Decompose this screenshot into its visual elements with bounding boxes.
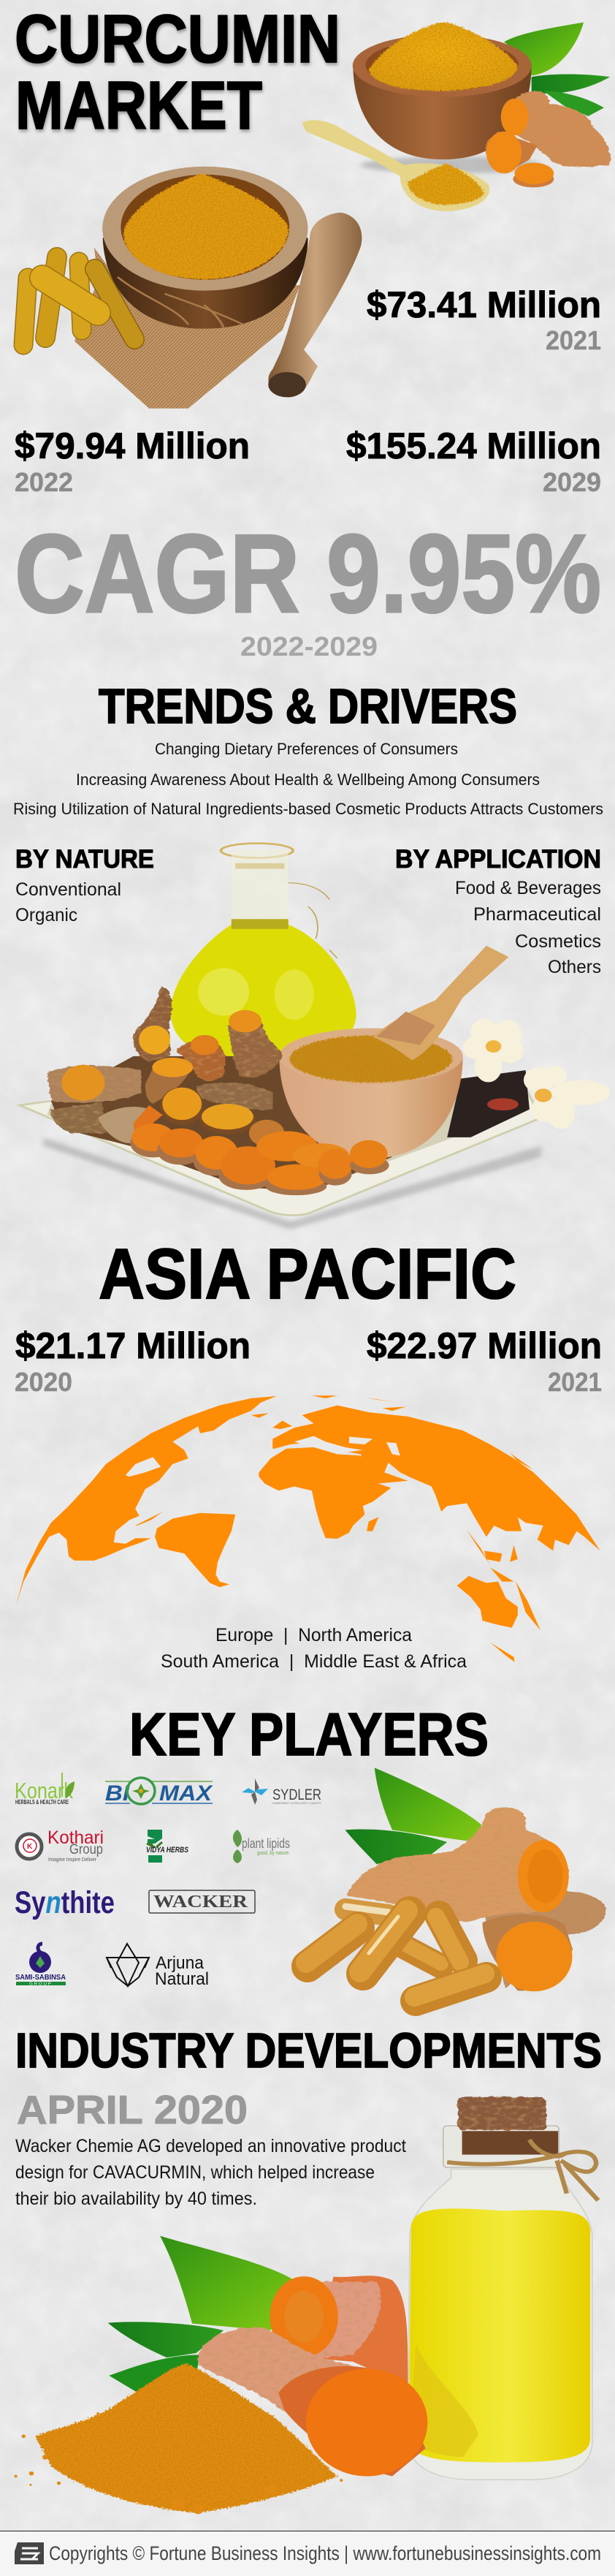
dark foliage and flowers (447, 1070, 530, 1137)
development date: APRIL 2020 (17, 2087, 248, 2132)
development description: their bio availability by 40 times. (15, 2189, 257, 2209)
list: trends and drivers (13, 740, 603, 818)
sliced roots (130, 1120, 389, 1195)
stat: 2022 market size: $79.94 Million (15, 425, 250, 466)
image: mortar with turmeric powder, pestle, burlap and dried fingers (23, 167, 362, 409)
heading: key players: KEY PLAYERS (129, 1700, 489, 1768)
logo: Biomax: MAX (159, 1781, 213, 1806)
logo: Sami-Sabinsa Group: G R O U P (29, 1982, 52, 1987)
roots (133, 986, 172, 1062)
segment: by application (395, 845, 601, 977)
image: turmeric oil bottle, roots, bowl on tray with flowers (20, 844, 610, 1230)
heading: Asia Pacific: ASIA PACIFIC (99, 1234, 516, 1314)
stat: 2021 market size: $73.41 Million (367, 284, 601, 325)
logo: Sami-Sabinsa Group: SAMI-SABINSA (15, 1974, 66, 1982)
stat: 2022 market size (15, 425, 250, 497)
logo: Biomax (105, 1778, 213, 1806)
segment: by nature: BY NATURE (15, 845, 154, 874)
CAGR figure: 2022-2029 (240, 632, 378, 662)
tray (20, 1088, 541, 1216)
stat: 2029 market size: 2029 (543, 467, 601, 497)
image: turmeric root with capsules and leaves (306, 1768, 606, 2001)
segment: by nature: Conventional (15, 879, 121, 900)
logo: Vidya Herbs (146, 1830, 189, 1863)
logo: Wacker: WACKER (153, 1893, 248, 1912)
logo: Vidya Herbs: VIDYA HERBS (146, 1846, 189, 1855)
development description: design for CAVACURMIN, which helped increase (15, 2162, 375, 2183)
title: CURCUMIN (15, 1, 340, 77)
footer logo (15, 2542, 44, 2564)
segment: by application: Pharmaceutical (473, 904, 601, 925)
development description (15, 2136, 406, 2209)
segment: by application: Cosmetics (515, 931, 601, 952)
stat: 2022 market size: 2022 (15, 467, 73, 497)
logo: Wacker (149, 1890, 255, 1913)
logo: Sydler: SYDLER (272, 1787, 321, 1803)
logo: Sydler (242, 1778, 321, 1805)
segment: by application: BY APPLICATION (395, 845, 601, 874)
list: other regions: Europe | North America (215, 1625, 412, 1645)
logo: Kothari Group: Imagine Inspire Deliver (48, 1857, 97, 1863)
logo: Biomax: BI (105, 1781, 130, 1806)
stat: Asia Pacific 2020: $21.17 Million (15, 1325, 251, 1366)
stat: Asia Pacific 2020: 2020 (15, 1367, 72, 1397)
title (15, 1, 340, 143)
logo: plant lipids: good. by nature. (257, 1851, 290, 1856)
logo: Konark: HERBALS & HEALTH CARE (15, 1799, 69, 1806)
logo: Kothari Group (17, 1827, 104, 1863)
logo: Arjuna Natural (107, 1944, 209, 1989)
logo: Sami-Sabinsa Group (15, 1944, 66, 1987)
segment: by application: Others (548, 957, 601, 977)
logo: Konark (15, 1773, 75, 1806)
title: MARKET (15, 67, 262, 143)
logo: plant lipids: plant lipids (242, 1836, 290, 1851)
logo: Konark: Konark (15, 1778, 73, 1803)
development description: Wacker Chemie AG developed an innovative product (15, 2136, 406, 2156)
list: other regions (161, 1625, 467, 1672)
food shadow mass (51, 1056, 392, 1191)
logo: Kothari Group: K (27, 1843, 33, 1851)
stat: 2021 market size (367, 284, 601, 355)
image: bowl of turmeric powder with spoon, root and leaves (302, 22, 611, 211)
heading: trends and drivers: TRENDS & DRIVERS (99, 679, 517, 734)
bowl (279, 1056, 463, 1159)
list: trends and drivers: Increasing Awareness About Health & Wellbeing Among Consumers (76, 770, 540, 789)
logo: Arjuna Natural: Natural (155, 1969, 209, 1989)
stat: 2021 market size: 2021 (546, 325, 601, 355)
stat: 2029 market size (346, 425, 601, 497)
stat: Asia Pacific 2021 (367, 1325, 602, 1397)
stat: 2029 market size: $155.24 Million (346, 425, 601, 466)
logo: Synthite: Synthite (15, 1885, 115, 1920)
segment: by nature (15, 845, 154, 925)
image: turmeric oil bottle with cork (408, 2097, 598, 2480)
logo: Kothari Group: Kothari (47, 1827, 104, 1848)
logo: plant lipids (233, 1830, 290, 1863)
image: turmeric powder, roots and leaves (14, 2236, 438, 2514)
list: trends and drivers: Changing Dietary Preferences of Consumers (155, 740, 458, 758)
stat: Asia Pacific 2020 (15, 1325, 251, 1397)
logo: Kothari Group: Group (69, 1842, 103, 1857)
footer (0, 2531, 615, 2576)
world map (15, 1395, 600, 1662)
logo: Arjuna Natural: Arjuna (156, 1953, 205, 1973)
logo: Sydler: COMMITMENT • EXCELLENCY • QUALITY (272, 1801, 321, 1805)
stat: Asia Pacific 2021: 2021 (548, 1367, 602, 1397)
list: other regions: South America | Middle East & Africa (161, 1651, 467, 1672)
segment: by application: Food & Beverages (455, 878, 601, 898)
list: trends and drivers: Rising Utilization of Natural Ingredients-based Cosmetic Products Attracts Customers (13, 800, 603, 818)
segment: by nature: Organic (15, 905, 77, 925)
stat: Asia Pacific 2021: $22.97 Million (367, 1325, 602, 1366)
